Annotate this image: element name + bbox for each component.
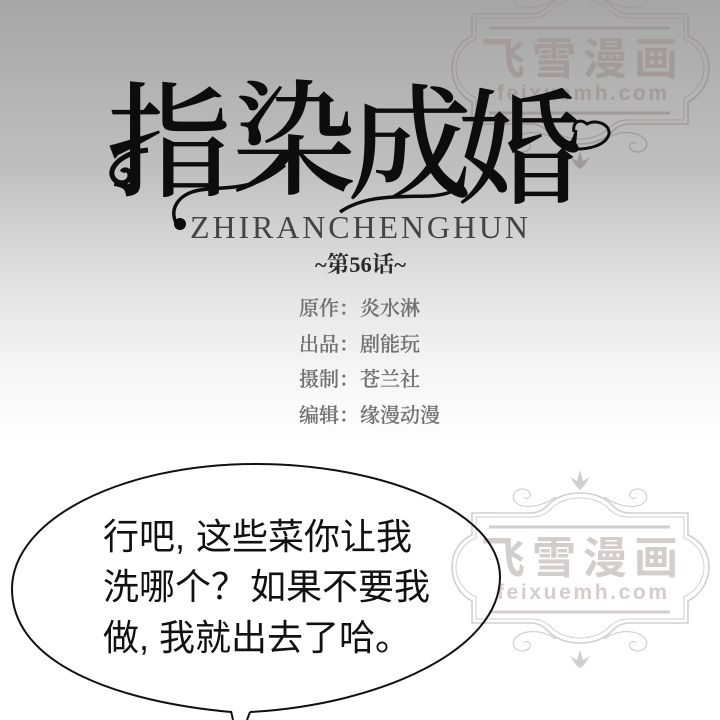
logo heart (570, 121, 609, 149)
logo dot (174, 218, 186, 230)
watermark: bottom: feixuemh.com (497, 581, 667, 604)
credits: 缘漫动漫 (360, 404, 440, 427)
bubble text: 这些菜你让我 (196, 516, 412, 557)
credits: 炎水淋 (360, 297, 420, 320)
title logo (107, 42, 609, 230)
credits: 苍兰社 (360, 367, 420, 391)
bubble text: 做, (103, 617, 149, 658)
bubble text: 行吧, (103, 516, 185, 557)
credits: 剧能玩 (360, 333, 420, 356)
background gradient panel (0, 0, 720, 445)
bubble text: 洗哪个？ (103, 566, 247, 607)
logo characters: 染 (232, 42, 356, 220)
credits (299, 297, 440, 427)
credit: studio: 摄制： (299, 368, 359, 391)
watermark: top: 飞雪漫画 (481, 35, 685, 84)
logo characters: 婚 (458, 51, 582, 229)
chapter number: ~第56话~ (315, 252, 406, 277)
watermark: top: feixuemh.com (497, 82, 667, 105)
logo flourish: left spiral (112, 150, 148, 183)
bubble outline (12, 464, 500, 712)
logo flourish: swirl under title (174, 165, 462, 226)
watermark: top (452, 0, 709, 169)
bubble text: 我就出去了哈。 (159, 617, 411, 658)
credit: author: 原作： (299, 297, 359, 320)
bubble text: 如果不要我 (250, 566, 430, 607)
bubble text (103, 516, 430, 658)
logo characters: 指 (107, 44, 231, 222)
credit: editor: 编辑： (299, 404, 359, 427)
logo characters: 成 (348, 46, 472, 224)
watermark: bottom: 飞雪漫画 (481, 534, 685, 583)
speech bubble (12, 464, 500, 720)
bubble tail (231, 711, 250, 720)
credit: producer: 出品： (299, 333, 359, 356)
watermark: bottom (452, 470, 709, 668)
romanized title: ZHIRANCHENGHUN (190, 209, 528, 245)
logo characters (107, 42, 582, 229)
